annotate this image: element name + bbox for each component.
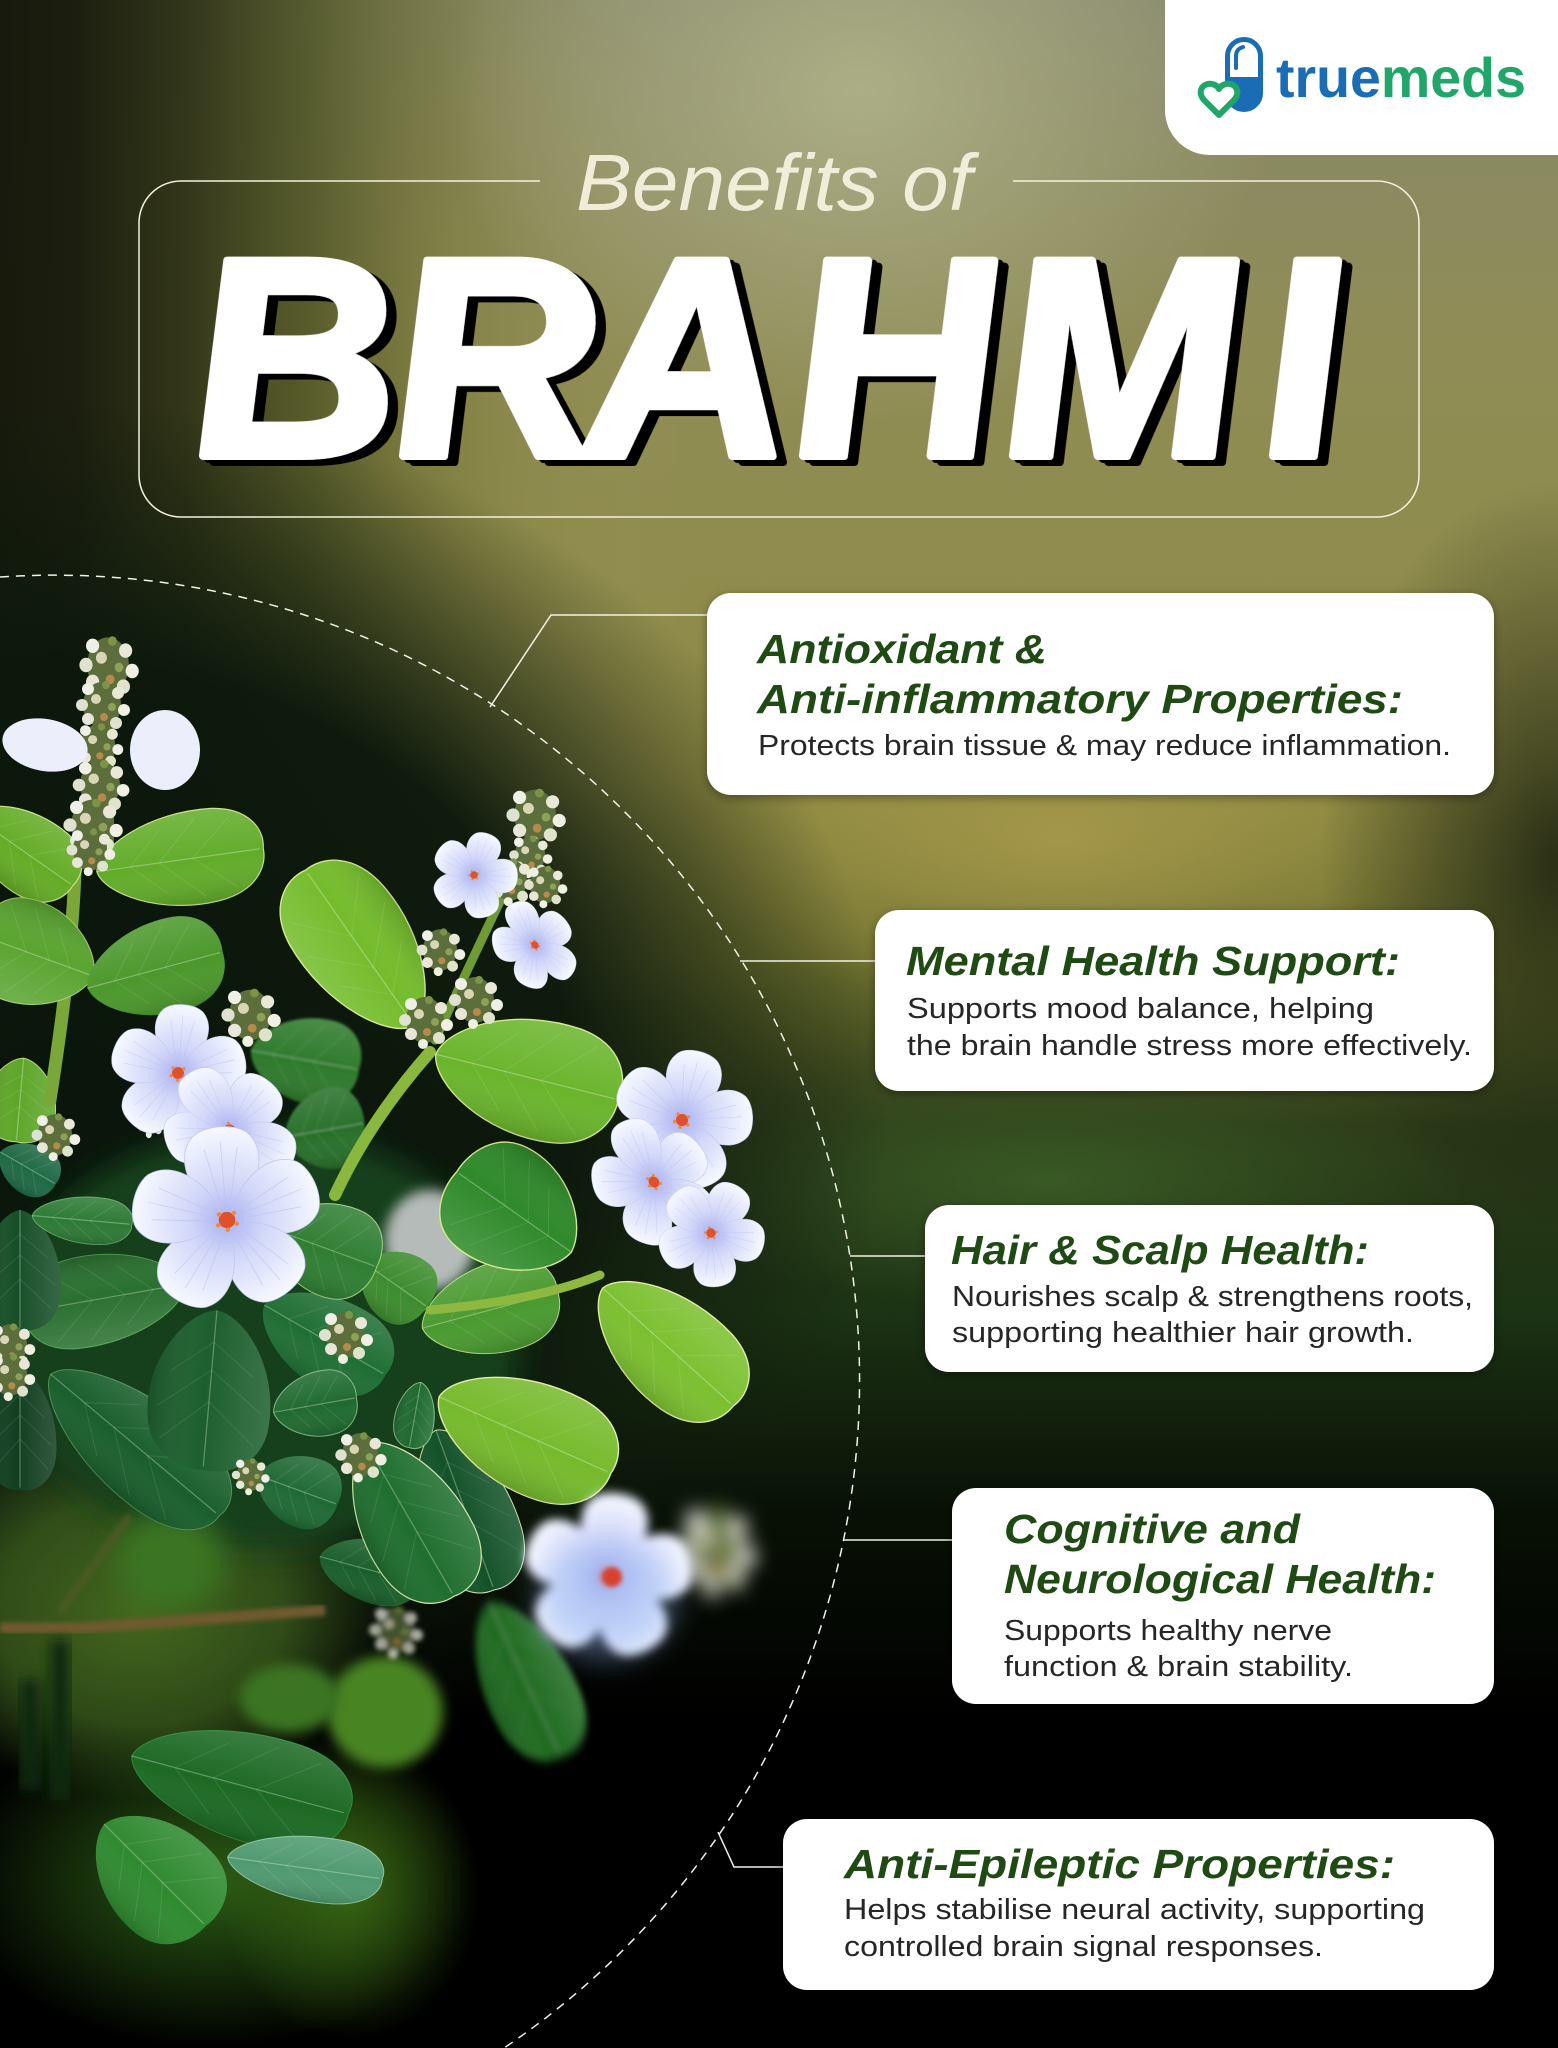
logo wordmark: truemeds xyxy=(1276,46,1526,109)
heading: antioxidant: Antioxidant & xyxy=(756,626,1047,672)
text: anti-epileptic: controlled brain signal responses. xyxy=(844,1931,1323,1963)
flower: blurred lower xyxy=(518,1484,699,1677)
connector: card 2 xyxy=(740,960,875,962)
heading: cognitive: Neurological Health: xyxy=(1004,1556,1436,1602)
logo panel xyxy=(1165,0,1558,155)
title: BRAHMI: BRAHMI xyxy=(180,200,1357,517)
dashed circle xyxy=(0,575,860,2048)
flower buds xyxy=(0,636,757,1659)
plant illustration xyxy=(0,636,788,2048)
connector: card 4 xyxy=(843,1539,952,1541)
panel: cognitive xyxy=(952,1488,1494,1704)
heading: cognitive: Cognitive and xyxy=(1004,1506,1301,1552)
flower: left cluster xyxy=(111,1004,320,1308)
bright leaves xyxy=(0,782,769,1623)
heading: mental health: Mental Health Support: xyxy=(906,938,1400,984)
heading: Benefits of: Benefits of xyxy=(576,138,980,227)
stems xyxy=(50,660,600,1310)
text: cognitive: function & brain stability. xyxy=(1004,1651,1353,1683)
text: mental health: Supports mood balance, helping xyxy=(907,993,1374,1025)
panel: antioxidant xyxy=(707,593,1494,795)
panel: hair and scalp xyxy=(925,1205,1494,1372)
panel: anti-epileptic xyxy=(783,1819,1494,1990)
heading: hair and scalp: Hair & Scalp Health: xyxy=(951,1227,1369,1273)
panel: mental health xyxy=(875,910,1494,1091)
connector: card 1 xyxy=(490,615,707,707)
icon: heart xyxy=(1201,84,1237,115)
heading: antioxidant: Anti-inflammatory Properties: xyxy=(756,676,1403,722)
heading: anti-epileptic: Anti-Epileptic Properties: xyxy=(843,1841,1395,1887)
icon: capsule xyxy=(1227,40,1262,110)
flowers: white upper spike xyxy=(434,832,576,989)
blurred lower foliage xyxy=(0,1130,603,2048)
logo: truemeds xyxy=(1165,0,1558,155)
text: anti-epileptic: Helps stabilise neural activity, supporting xyxy=(844,1894,1425,1926)
connector: card 5 xyxy=(718,1832,783,1867)
back leaves xyxy=(0,1007,570,1615)
text: antioxidant: Protects brain tissue & may reduce inflammation. xyxy=(758,730,1451,762)
connector: card 3 xyxy=(850,1255,925,1257)
text: hair and scalp: supporting healthier hair growth. xyxy=(952,1317,1414,1349)
flower: spike petals top left xyxy=(0,710,200,790)
text: mental health: the brain handle stress more effectively. xyxy=(907,1030,1472,1062)
flower: right cluster xyxy=(591,1050,765,1288)
text: cognitive: Supports healthy nerve xyxy=(1004,1615,1332,1647)
text: hair and scalp: Nourishes scalp & strengthens roots, xyxy=(952,1281,1473,1313)
lower sharp leaves xyxy=(96,1730,384,1944)
title frame xyxy=(139,181,1419,517)
